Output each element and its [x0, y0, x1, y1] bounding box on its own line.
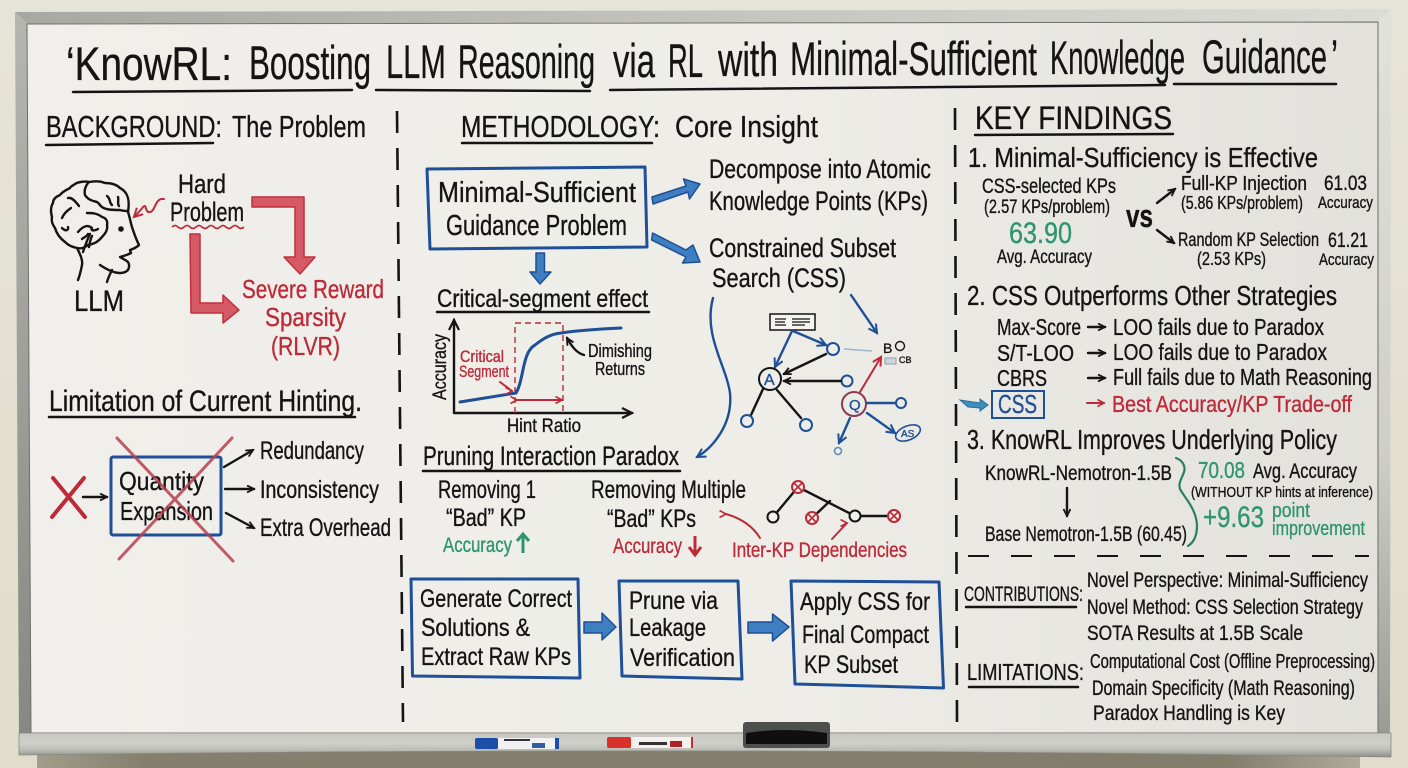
comparison rows: [997, 314, 1372, 391]
text: removing 1 bad KP: “Bad” KP: [446, 504, 526, 532]
heading: background: BACKGROUND:: [46, 109, 222, 144]
eraser: [743, 722, 830, 748]
stat: +9.63: improvement: [1272, 518, 1365, 540]
contributions: [964, 569, 1368, 645]
heading: limitation: Limitation of Current Hinting.: [49, 385, 362, 418]
heading: pruning interaction paradox: Pruning Interaction Paradox: [423, 441, 679, 471]
stat: 70.08: [1191, 457, 1373, 501]
flow step 3: KP Subset: [804, 651, 898, 679]
flow step 3: [791, 581, 944, 688]
title: LLM: [386, 35, 446, 88]
label: hard problem: Hard: [178, 169, 226, 199]
arrow: squiggle to brain: [134, 199, 164, 217]
title: RL: [668, 34, 703, 87]
text: constrained subset search: Search (CSS): [712, 263, 846, 293]
finding 1: 1. Minimal-Sufficiency is Effective: [968, 142, 1318, 173]
heading: key findings: KEY FINDINGS: [975, 100, 1172, 136]
arrow: CSS pointer: [960, 399, 988, 411]
comparison rows: LOO fails due to Paradox: [1113, 339, 1327, 365]
chart: critical-segment effect: Critical: [460, 347, 504, 366]
text: removing multiple bad KPs: Removing Multiple: [591, 476, 746, 504]
text: removing multiple bad KPs: Accuracy: [613, 535, 682, 558]
box: quantity expansion: Expansion: [120, 496, 213, 526]
full-KP stat: 61.03: [1324, 172, 1367, 195]
limitations: LIMITATIONS:: [967, 659, 1084, 685]
text: decompose: [709, 154, 931, 216]
diagram: knowledge graph: AS: [901, 429, 915, 440]
panel: background: [46, 109, 391, 561]
consequences list: Redundancy: [260, 437, 364, 465]
arrow: [83, 496, 107, 498]
blue marker: [475, 738, 559, 749]
stat: 70.08: Avg. Accuracy: [1253, 460, 1357, 483]
diagram: knowledge graph: [741, 314, 923, 454]
small icons cluster: CB: [899, 355, 912, 365]
small icons cluster: [883, 340, 912, 365]
text: removing 1 bad KP: Accuracy: [443, 534, 512, 557]
finding 3: Base Nemotron-1.5B (60.45): [985, 523, 1187, 546]
icon: red X: [52, 478, 85, 517]
title: Knowledge: [1050, 31, 1185, 84]
title: via: [613, 34, 656, 87]
consequences list: Inconsistency: [260, 476, 379, 504]
chart: critical-segment effect: Hint Ratio: [507, 416, 581, 437]
CSS-selected stat: [982, 175, 1116, 268]
flow step 1: Generate Correct: [420, 585, 572, 613]
text: removing multiple bad KPs: “Bad” KPs: [607, 505, 696, 533]
CSS-selected stat: (2.57 KPs/problem): [984, 197, 1110, 218]
arrow: red elbow right: [252, 197, 315, 274]
random-KP stat: (2.53 KPs): [1197, 249, 1266, 269]
icon: LLM head with brain: [51, 181, 139, 282]
stat: 70.08: 70.08: [1198, 457, 1245, 483]
limitations: [967, 651, 1375, 725]
arrow: step 1 to 2: [584, 613, 616, 640]
flow step 3: Final Compact: [802, 621, 929, 649]
chart: critical-segment effect: Accuracy: [430, 334, 451, 400]
box: minimal-sufficient guidance problem: [427, 167, 647, 249]
label: LLM: LLM: [74, 285, 124, 318]
text: severe reward sparsity: Sparsity: [265, 302, 346, 332]
random-KP stat: 61.21: [1328, 229, 1368, 252]
arrow: to CSS: [652, 233, 700, 263]
flow step 2: Prune via: [629, 587, 718, 615]
panel: methodology: [411, 109, 944, 688]
comparison rows: S/T-LOO: [997, 340, 1074, 366]
document node: [770, 314, 815, 330]
diagram: knowledge graph: A: [764, 372, 775, 389]
text: severe reward sparsity: Severe Reward: [242, 274, 384, 304]
stat: 70.08: (WITHOUT KP hints at inference): [1191, 484, 1373, 501]
flow step 2: [619, 581, 742, 679]
text: severe reward sparsity: (RLVR): [271, 331, 340, 361]
heading: methodology: METHODOLOGY:: [461, 109, 660, 144]
arrow: to atomic KPs: [652, 179, 700, 204]
label: inter-KP dependencies: Inter-KP Dependencies: [732, 539, 907, 562]
label: hard problem: [170, 169, 244, 228]
comparison rows: Max-Score: [997, 314, 1081, 340]
arrow: red elbow left: [190, 234, 239, 323]
box: minimal-sufficient guidance problem: Guidance Problem: [446, 210, 627, 242]
flow step 3: Apply CSS for: [800, 588, 930, 616]
title: ’: [1331, 30, 1338, 83]
flow step 1: Solutions &: [421, 614, 530, 642]
full-KP stat: [1181, 172, 1373, 213]
random-KP stat: Random KP Selection: [1178, 230, 1319, 251]
title: with: [717, 33, 778, 86]
consequences list: [224, 437, 391, 542]
limitations: Paradox Handling is Key: [1093, 702, 1285, 725]
CSS-selected stat: 63.90: [1009, 217, 1072, 250]
title: [66, 30, 1338, 92]
full-KP stat: (5.86 KPs/problem): [1181, 193, 1303, 213]
column dividers: [397, 108, 957, 722]
flow step 2: Leakage: [629, 614, 706, 642]
finding 2: [960, 280, 1372, 419]
flow step 1: Extract Raw KPs: [421, 643, 571, 671]
comparison rows: LOO fails due to Paradox: [1113, 314, 1324, 340]
contributions: SOTA Results at 1.5B Scale: [1087, 622, 1303, 645]
arrow: long curve to paradox: [697, 298, 730, 457]
text: constrained subset search: [709, 233, 896, 293]
finding 3: KnowRL-Nemotron-1.5B: [985, 462, 1172, 485]
title: Minimal-Sufficient: [790, 32, 1037, 85]
brace: [1176, 458, 1197, 546]
small icons cluster: B: [883, 340, 892, 356]
diagram: knowledge graph: Q: [849, 397, 861, 414]
CSS-selected stat: CSS-selected KPs: [982, 175, 1116, 198]
comparison rows: CBRS: [997, 365, 1047, 391]
box: quantity expansion: [111, 438, 233, 561]
title: Boosting: [249, 36, 371, 89]
marker tray: [19, 733, 1391, 757]
random-KP stat: [1178, 229, 1374, 269]
arrow: down to critical segment: [530, 253, 551, 284]
label: inter-KP dependencies: [726, 514, 907, 562]
text: severe reward sparsity: [242, 274, 384, 361]
box: minimal-sufficient guidance problem: Minimal-Sufficient: [438, 177, 636, 209]
random-KP stat: Accuracy: [1319, 250, 1374, 269]
finding 3: [967, 424, 1373, 546]
text: decompose: Decompose into Atomic: [709, 154, 931, 184]
CSS highlight box: CSS: [998, 389, 1037, 419]
chart: critical-segment effect: [430, 285, 652, 437]
text: removing multiple bad KPs: [591, 476, 746, 558]
arrow: step 2 to 3: [748, 614, 789, 641]
text: removing 1 bad KP: Removing 1: [438, 476, 536, 504]
flow step 1: [411, 579, 580, 678]
CSS-selected stat: Avg. Accuracy: [997, 247, 1092, 268]
diagram: pruned dependency graph: [768, 481, 900, 524]
heading: methodology: Core Insight: [675, 109, 818, 144]
label: hard problem: Problem: [170, 197, 244, 227]
red marker: [607, 737, 693, 748]
title: ‘KnowRL:: [66, 37, 232, 90]
heading: background: The Problem: [232, 109, 366, 144]
contributions: CONTRIBUTIONS:: [964, 583, 1083, 606]
title: Reasoning: [458, 35, 595, 88]
chart: critical-segment effect: Segment: [459, 362, 509, 381]
stat: +9.63: [1203, 500, 1365, 540]
panel: key findings: [960, 100, 1375, 725]
box: quantity expansion: Quantity: [119, 466, 204, 496]
flow step 2: Verification: [630, 644, 735, 672]
stat: +9.63: point: [1272, 500, 1310, 522]
chart: critical-segment effect: Critical-segment effect: [437, 285, 648, 313]
text: removing 1 bad KP: [438, 476, 536, 557]
text: constrained subset search: Constrained Subset: [709, 233, 896, 263]
chart: critical-segment effect: Dimishing: [588, 341, 652, 361]
full-KP stat: Full-KP Injection: [1181, 173, 1307, 195]
shelf shadow below board: [37, 748, 1360, 768]
full-KP stat: Accuracy: [1318, 193, 1373, 212]
vs label: vs: [1126, 198, 1153, 234]
finding 2: Best Accuracy/KP Trade-off: [1112, 391, 1353, 417]
finding 1: [968, 142, 1374, 269]
chart: critical-segment effect: Returns: [595, 359, 645, 379]
consequences list: Extra Overhead: [260, 514, 391, 542]
text: decompose: Knowledge Points (KPs): [709, 186, 928, 216]
stat: +9.63: +9.63: [1203, 501, 1264, 534]
title: Guidance: [1202, 30, 1327, 83]
arrow: CSS to graph: [851, 295, 877, 333]
